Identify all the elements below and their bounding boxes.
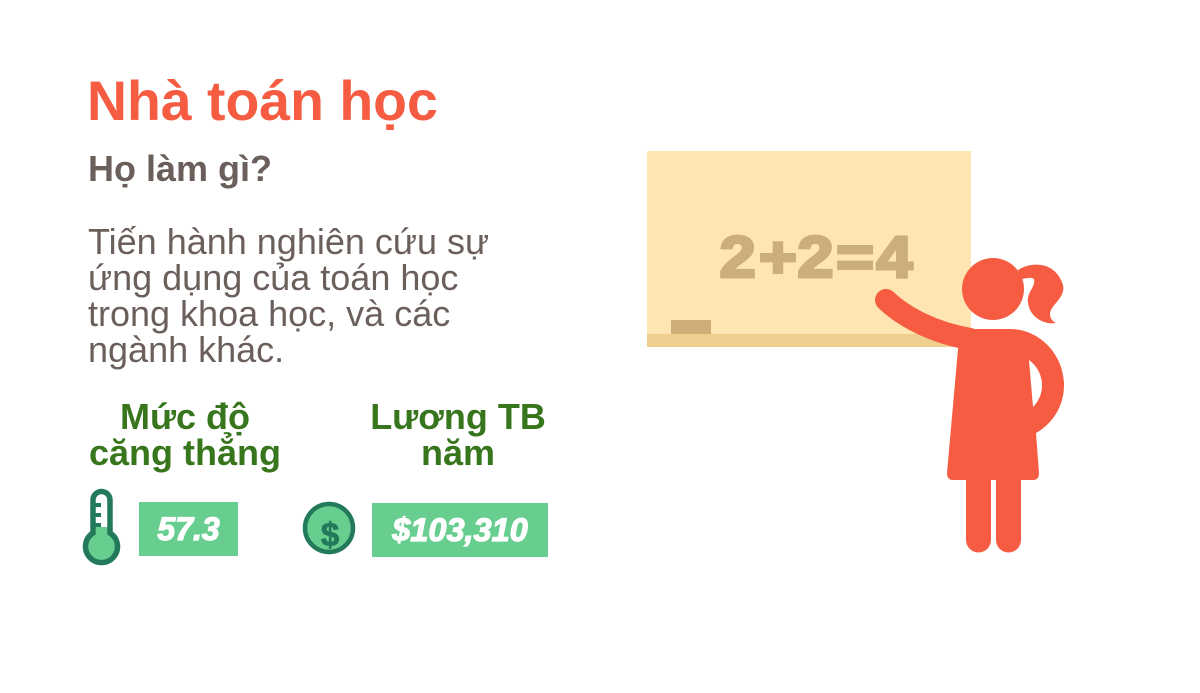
salary label (370, 396, 546, 473)
description text: trong khoa học, và các (88, 293, 450, 334)
description text: ngành khác. (88, 329, 284, 370)
stress label: căng thẳng (89, 432, 281, 473)
chalkboard (647, 151, 971, 335)
salary value badge: $103,310 (392, 512, 528, 548)
illustration: teacher at chalkboard (647, 151, 1064, 552)
teacher figure (886, 258, 1064, 552)
subheading: Họ làm gì? (88, 148, 272, 189)
stress value badge (139, 502, 238, 556)
eraser (671, 320, 711, 334)
title: Nhà toán học (87, 70, 438, 132)
description text: Tiến hành nghiên cứu sự (88, 221, 489, 262)
salary value badge (372, 503, 548, 557)
description text (88, 221, 489, 370)
description text: ứng dụng của toán học (88, 257, 458, 298)
icon: thermometer (82, 488, 120, 566)
equation: 2+2=4 (720, 225, 913, 290)
stress value badge: 57.3 (157, 511, 220, 547)
chalk tray (647, 334, 971, 347)
icon: dollar coin (302, 502, 356, 554)
salary label: năm (421, 432, 495, 473)
salary label: Lương TB (370, 396, 546, 437)
icon: dollar coin: $ (321, 516, 339, 553)
stress label (89, 396, 281, 473)
stress label: Mức độ (120, 396, 250, 437)
